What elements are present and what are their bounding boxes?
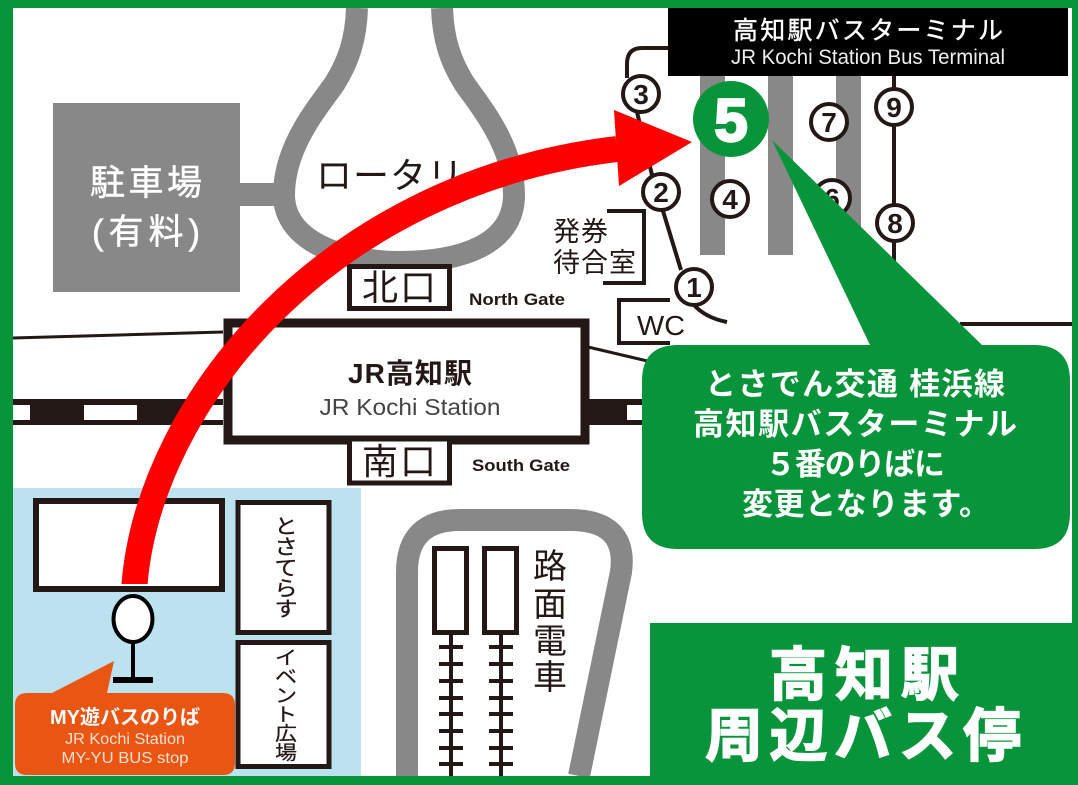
bus terminal header: JR Kochi Station Bus Terminal: [731, 46, 1005, 69]
callout: change to bay 5: ５番のりばに: [765, 447, 945, 482]
title block: [650, 623, 1078, 785]
bay 4: 4: [722, 184, 738, 215]
bay 3: [623, 76, 659, 112]
panel: MY-YU bus stop area: [13, 488, 361, 776]
title block: 高知駅: [769, 643, 959, 708]
bay 2: 2: [653, 177, 669, 208]
ticket office and waiting room: 発券: [553, 217, 608, 247]
Tosaterasu building: す: [274, 598, 298, 621]
north gate: 北口: [362, 267, 436, 308]
bay 8: 8: [887, 208, 903, 239]
bay 7: [811, 104, 847, 140]
bus terminal header: 高知駅バスターミナル: [733, 17, 1003, 45]
JR Kochi Station building: [228, 323, 585, 440]
tram label: 車: [533, 659, 567, 697]
tram label: 電: [533, 623, 567, 661]
restroom: WC: [637, 310, 685, 341]
tram label: 路: [533, 548, 567, 586]
railway line: [13, 332, 660, 425]
south gate label: South Gate: [472, 456, 570, 475]
parking area: [53, 103, 282, 292]
callout: MY-YU bus stop: MY-YU BUS stop: [62, 750, 189, 767]
event plaza building: 広: [275, 723, 297, 744]
bay connecting lines: [627, 48, 1072, 324]
event plaza building: ベ: [275, 667, 297, 688]
tram platforms and tracks: [434, 548, 516, 776]
callout: change to bay 5: 変更となります。: [742, 487, 990, 522]
north gate label: North Gate: [469, 290, 565, 309]
ticket office and waiting room: 待合室: [553, 248, 636, 278]
JR Kochi Station building: JR高知駅: [348, 358, 472, 389]
event plaza building: ン: [275, 685, 297, 707]
Tosaterasu building: と: [274, 515, 298, 538]
callout: change to bay 5: [642, 140, 1070, 549]
bay 5 highlight: [693, 81, 769, 157]
title block: 周辺バス停: [705, 704, 1021, 769]
bay 7: 7: [821, 107, 837, 138]
bay 8: [877, 205, 913, 241]
Tosaterasu building: て: [274, 556, 298, 580]
event plaza building: イ: [275, 648, 297, 669]
bus bays: [700, 70, 861, 255]
bay 6: 6: [824, 183, 840, 214]
south gate: [350, 439, 450, 483]
rotary road: [284, 8, 514, 262]
bay 5 highlight: 5: [714, 87, 748, 154]
callout: change to bay 5: とさでん交通 桂浜線: [705, 367, 1005, 402]
bay 4: [712, 181, 748, 217]
JR Kochi Station building: JR Kochi Station: [320, 394, 500, 420]
station plaza building: [36, 501, 222, 589]
callout: MY-YU bus stop: JR Kochi Station: [65, 731, 185, 748]
bay 9: [876, 89, 912, 125]
bay 1: 1: [686, 272, 702, 303]
restroom: [619, 300, 685, 343]
callout: change to bay 5: 高知駅バスターミナル: [693, 407, 1017, 442]
Tosaterasu building: さ: [274, 535, 298, 559]
ticket office and waiting room: [553, 211, 644, 283]
event plaza building: [238, 642, 329, 766]
bay 6: [814, 180, 850, 216]
Tosaterasu building: [238, 502, 329, 632]
rotary label: ロータリー: [316, 155, 500, 196]
bay 1: [676, 269, 712, 305]
bay 9: 9: [886, 92, 902, 123]
tram label: 面: [533, 586, 567, 624]
event plaza building: 場: [275, 742, 297, 763]
south gate: 南口: [362, 441, 436, 482]
bay 2: [643, 174, 679, 210]
parking area: 駐車場: [90, 164, 202, 203]
callout: MY-YU bus stop: MY遊バスのりば: [50, 705, 200, 729]
arrow: route to bay 5: [133, 110, 692, 610]
icon: bus stop sign: [113, 596, 153, 683]
Tosaterasu building: ら: [274, 577, 298, 600]
parking area: (有料): [92, 213, 200, 252]
bus terminal header: [668, 8, 1068, 76]
bay 3: 3: [633, 79, 649, 110]
event plaza building: ト: [275, 704, 297, 726]
tram road: [407, 520, 622, 776]
callout: MY-YU bus stop: [15, 661, 235, 775]
